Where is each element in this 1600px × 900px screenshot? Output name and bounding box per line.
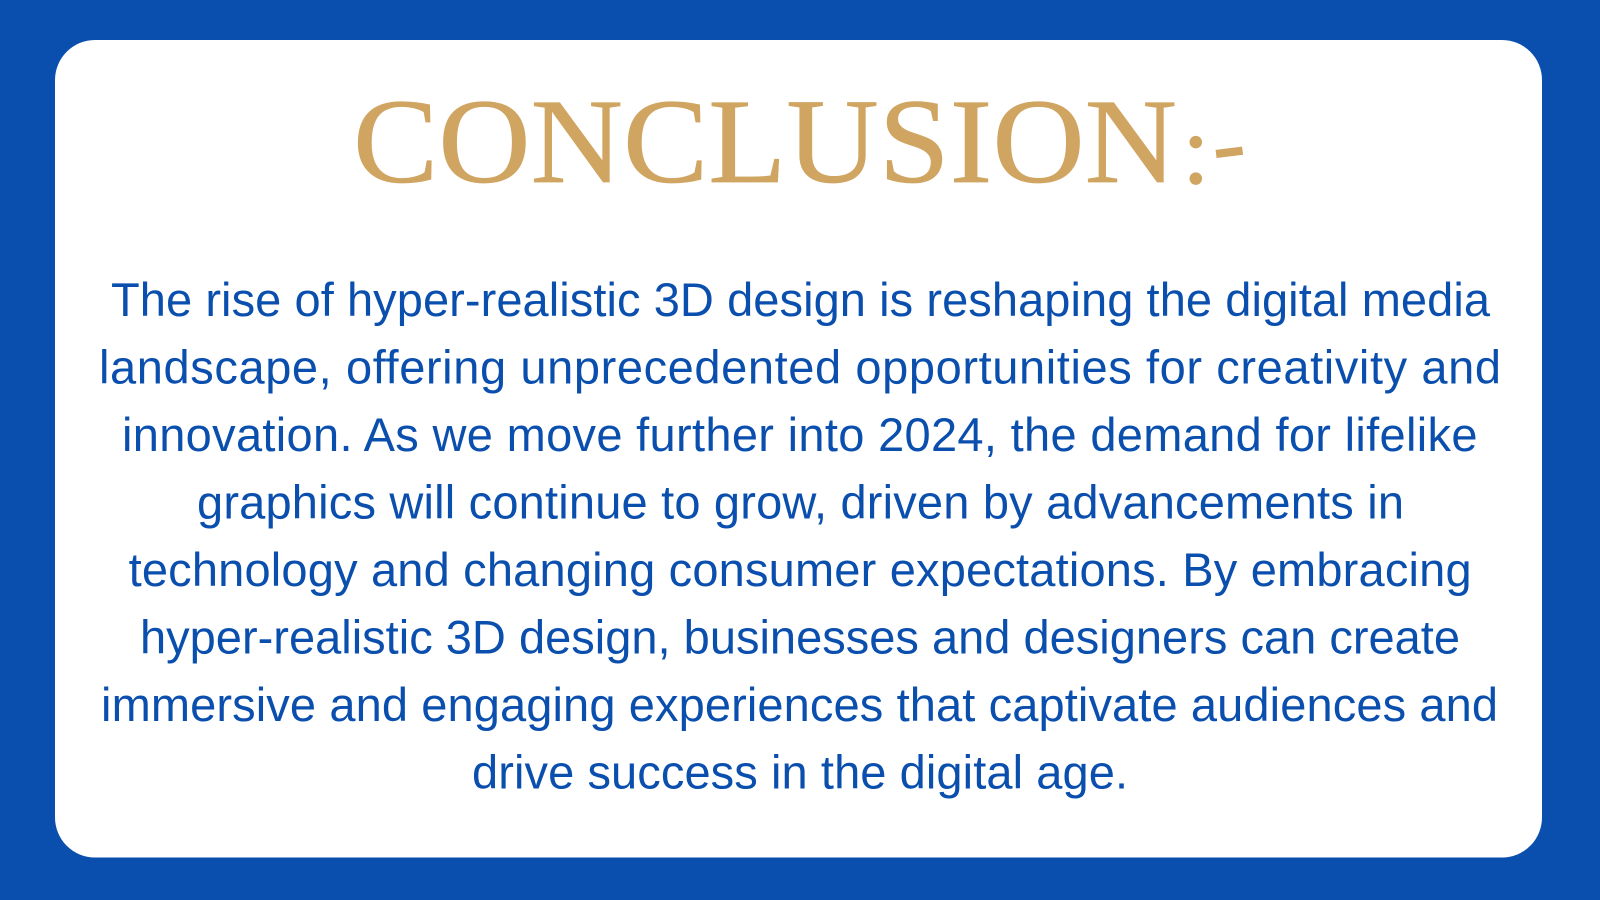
body paragraph: innovation. As we move further into 2024, the demand for lifelike: [122, 408, 1478, 461]
body paragraph: drive success in the digital age.: [472, 745, 1128, 798]
body paragraph: hyper-realistic 3D design, businesses and designers can create: [140, 610, 1460, 663]
title: -: [1205, 85, 1251, 200]
body paragraph: immersive and engaging experiences that captivate audiences and: [101, 678, 1498, 731]
body paragraph: [99, 273, 1501, 798]
body paragraph: technology and changing consumer expectations. By embracing: [129, 543, 1472, 596]
title: :: [1182, 94, 1210, 205]
title: CONCLUSION: [353, 75, 1177, 209]
body paragraph: graphics will continue to grow, driven by advancements in: [197, 475, 1404, 528]
body paragraph: The rise of hyper-realistic 3D design is reshaping the digital media: [111, 273, 1491, 326]
body paragraph: landscape, offering unprecedented opportunities for creativity and: [99, 340, 1501, 394]
